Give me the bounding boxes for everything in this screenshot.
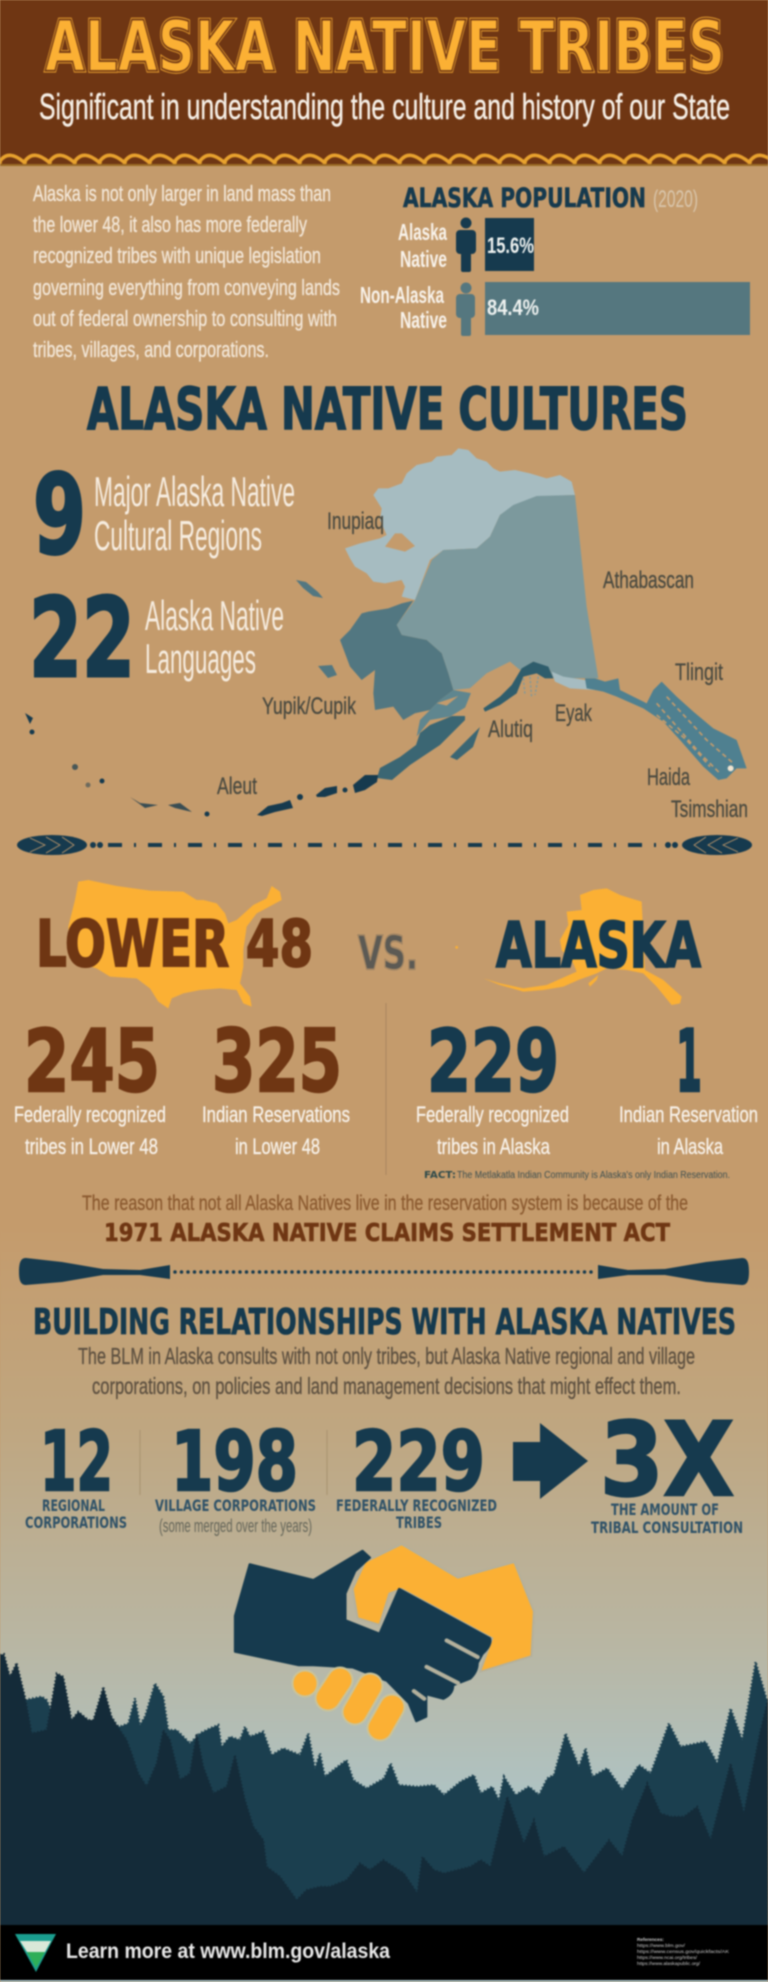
- stat: 325 reservations: [202, 1012, 350, 1159]
- stat: 1 reservation: 1: [676, 1012, 702, 1112]
- heading: vs.: VS.: [358, 926, 418, 980]
- stat: 12 regional corporations: 12: [40, 1415, 113, 1510]
- label: Alaska Native: Alaska: [398, 219, 447, 245]
- finger gaps: [414, 1640, 478, 1699]
- stat: 1 reservation: [619, 1012, 758, 1159]
- stat: 229 federally recognized tribes: 229: [352, 1415, 485, 1510]
- stat: 1 reservation: in Alaska: [657, 1134, 724, 1159]
- population heading: (2020): [653, 186, 698, 213]
- icon: BLM logo: [15, 1934, 56, 1972]
- divider: feathers: [17, 835, 752, 855]
- stat: 3X tribal consultation: THE AMOUNT OF: [611, 1500, 719, 1519]
- region: Kenai arc: [483, 662, 553, 712]
- population heading: ALASKA POPULATION: [403, 183, 646, 214]
- stat: 12 regional corporations: REGIONAL: [42, 1496, 105, 1515]
- footer bar: [0, 1925, 768, 1980]
- stat: 9 cultural regions: [33, 451, 295, 579]
- panel: Lower 48 vs Alaska: [14, 880, 758, 1247]
- references: https://www.census.gov/quickfacts/AK: [637, 1949, 729, 1954]
- references: References:: [637, 1937, 665, 1942]
- heading: vs.: VS.: [358, 926, 418, 980]
- map: Alaska cultural regions: [25, 448, 747, 816]
- Cook Inlet: [467, 664, 512, 710]
- arrow: [513, 1423, 588, 1499]
- rope divider: [0, 152, 768, 166]
- stat: 245 tribes: tribes in Lower 48: [25, 1134, 158, 1159]
- stat: 9 cultural regions: Cultural Regions: [94, 512, 262, 559]
- mainland regions: [340, 448, 598, 737]
- intro paragraph: governing everything from conveying lands: [33, 275, 340, 300]
- stat: 229 federally recognized tribes: TRIBES: [396, 1513, 442, 1532]
- intro paragraph: recognized tribes with unique legislation: [33, 243, 321, 268]
- intro paragraph: Alaska is not only larger in land mass than: [33, 181, 331, 206]
- icon: handshake: [235, 1544, 534, 1728]
- region: Kodiak: [450, 727, 480, 760]
- stat: 229 tribes: Federally recognized: [416, 1102, 569, 1127]
- fact note: FACT:: [424, 1170, 456, 1181]
- bar: Alaska Native 15.6%: [485, 218, 534, 271]
- map labels: Aleut: [217, 773, 257, 800]
- stat: 22 languages: Alaska Native: [145, 592, 284, 639]
- stat: 12 regional corporations: CORPORATIONS: [25, 1513, 127, 1532]
- map labels: Alutiq: [488, 716, 533, 743]
- stat: 9 cultural regions: 9: [33, 451, 86, 579]
- references: https://www.alaskapublic.org/: [637, 1961, 701, 1966]
- intro paragraph: [33, 181, 340, 362]
- yellow hand: [353, 1544, 534, 1672]
- region: Athabascan: [397, 495, 598, 690]
- stat: 229 tribes: [416, 1012, 569, 1159]
- map labels: Athabascan: [603, 567, 694, 594]
- region: Yupik/Cupik: [340, 601, 453, 720]
- stat: 198 village corporations: (some merged over the years): [159, 1516, 312, 1536]
- stat: 229 federally recognized tribes: [336, 1415, 497, 1532]
- label: Alaska Native: [398, 219, 447, 272]
- stat: 22 languages: [29, 575, 284, 702]
- stat: 229 federally recognized tribes: FEDERALLY RECOGNIZED: [336, 1496, 497, 1515]
- stat: 229 tribes: 229: [427, 1012, 559, 1112]
- heading: vs.: [358, 926, 418, 980]
- heading: Alaska: ALASKA: [496, 909, 701, 982]
- stat: 325 reservations: Indian Reservations: [202, 1102, 350, 1127]
- panel: Alaska population: [360, 183, 750, 336]
- region: Alutiq peninsula: [377, 716, 465, 780]
- map: Alaska silhouette: [455, 888, 682, 1005]
- scene: forest silhouette: [0, 1654, 768, 1927]
- intro paragraph: out of federal ownership to consulting with: [33, 306, 337, 331]
- references: https://www.blm.gov/: [637, 1943, 686, 1948]
- St Lawrence and Nunivak islands: [296, 580, 337, 678]
- bar: Non-Alaska Native 84.4%: [485, 282, 750, 335]
- front tree layer: [0, 1654, 768, 1927]
- stat: 245 tribes: 245: [24, 1012, 160, 1112]
- text: BLM consultation: [78, 1343, 695, 1399]
- fact note: The Metlakatla Indian Community is Alaska's only Indian Reservation.: [457, 1170, 730, 1181]
- stat: 22 languages: Languages: [145, 635, 256, 682]
- region: Aleut islands: [25, 713, 378, 816]
- stat: 229 tribes: tribes in Alaska: [437, 1134, 551, 1159]
- coastal regions: [483, 662, 747, 780]
- map labels: [217, 508, 748, 823]
- map labels: Inupiaq: [327, 508, 384, 535]
- stat: 245 tribes: [14, 1012, 166, 1159]
- intro paragraph: the lower 48, it also has more federally: [33, 212, 307, 237]
- stat: 198 village corporations: 198: [171, 1415, 298, 1510]
- references: [637, 1937, 729, 1966]
- bar: Alaska Native 15.6%: 15.6%: [487, 233, 534, 258]
- settlement act note: 1971 ALASKA NATIVE CLAIMS SETTLEMENT ACT: [104, 1218, 670, 1247]
- map labels: Haida: [647, 764, 690, 791]
- stat: 9 cultural regions: Major Alaska Native: [94, 468, 295, 515]
- references: https://www.ncai.org/tribes/: [637, 1955, 698, 1960]
- heading: Lower 48: LOWER 48: [36, 908, 313, 982]
- intro paragraph: tribes, villages, and corporations.: [33, 337, 269, 362]
- stat: 22 languages: 22: [29, 575, 135, 702]
- label: Alaska Native: Native: [400, 246, 447, 272]
- label: Non-Alaska Native: Non-Alaska: [360, 282, 444, 308]
- region: Bristol Bay: [417, 690, 472, 737]
- footer link: Learn more at www.blm.gov/alaska: [66, 1940, 390, 1963]
- map: lower 48: [68, 880, 282, 1008]
- icon: person dark: [456, 218, 476, 272]
- region: Tlingit: [585, 678, 747, 780]
- stat: 3X tribal consultation: 3X: [600, 1401, 734, 1520]
- icon: person teal: [456, 282, 475, 336]
- bar: Non-Alaska Native 84.4%: 84.4%: [487, 295, 539, 320]
- settlement act note: [82, 1192, 688, 1247]
- back tree layer: [25, 1662, 768, 1927]
- map labels: Tlingit: [675, 659, 723, 686]
- map labels: Eyak: [555, 700, 593, 727]
- region: Inupiaq: [345, 448, 575, 600]
- header banner: [0, 0, 768, 153]
- region: Eyak: [552, 672, 595, 690]
- divider: paddles: [19, 1258, 749, 1285]
- stat: 325 reservations: in Lower 48: [235, 1134, 320, 1159]
- stat: 12 regional corporations: [25, 1415, 127, 1532]
- label: Non-Alaska Native: [360, 282, 447, 333]
- stat: 198 village corporations: VILLAGE CORPORATIONS: [155, 1496, 316, 1515]
- stat: 245 tribes: Federally recognized: [14, 1102, 166, 1127]
- map labels: Yupik/Cupik: [262, 693, 357, 720]
- navy hand: [235, 1551, 490, 1721]
- stat: 198 village corporations: [155, 1415, 316, 1536]
- label: Non-Alaska Native: Native: [400, 307, 447, 333]
- yellow fingers: [305, 1680, 392, 1728]
- stat: 325 reservations: 325: [212, 1012, 342, 1112]
